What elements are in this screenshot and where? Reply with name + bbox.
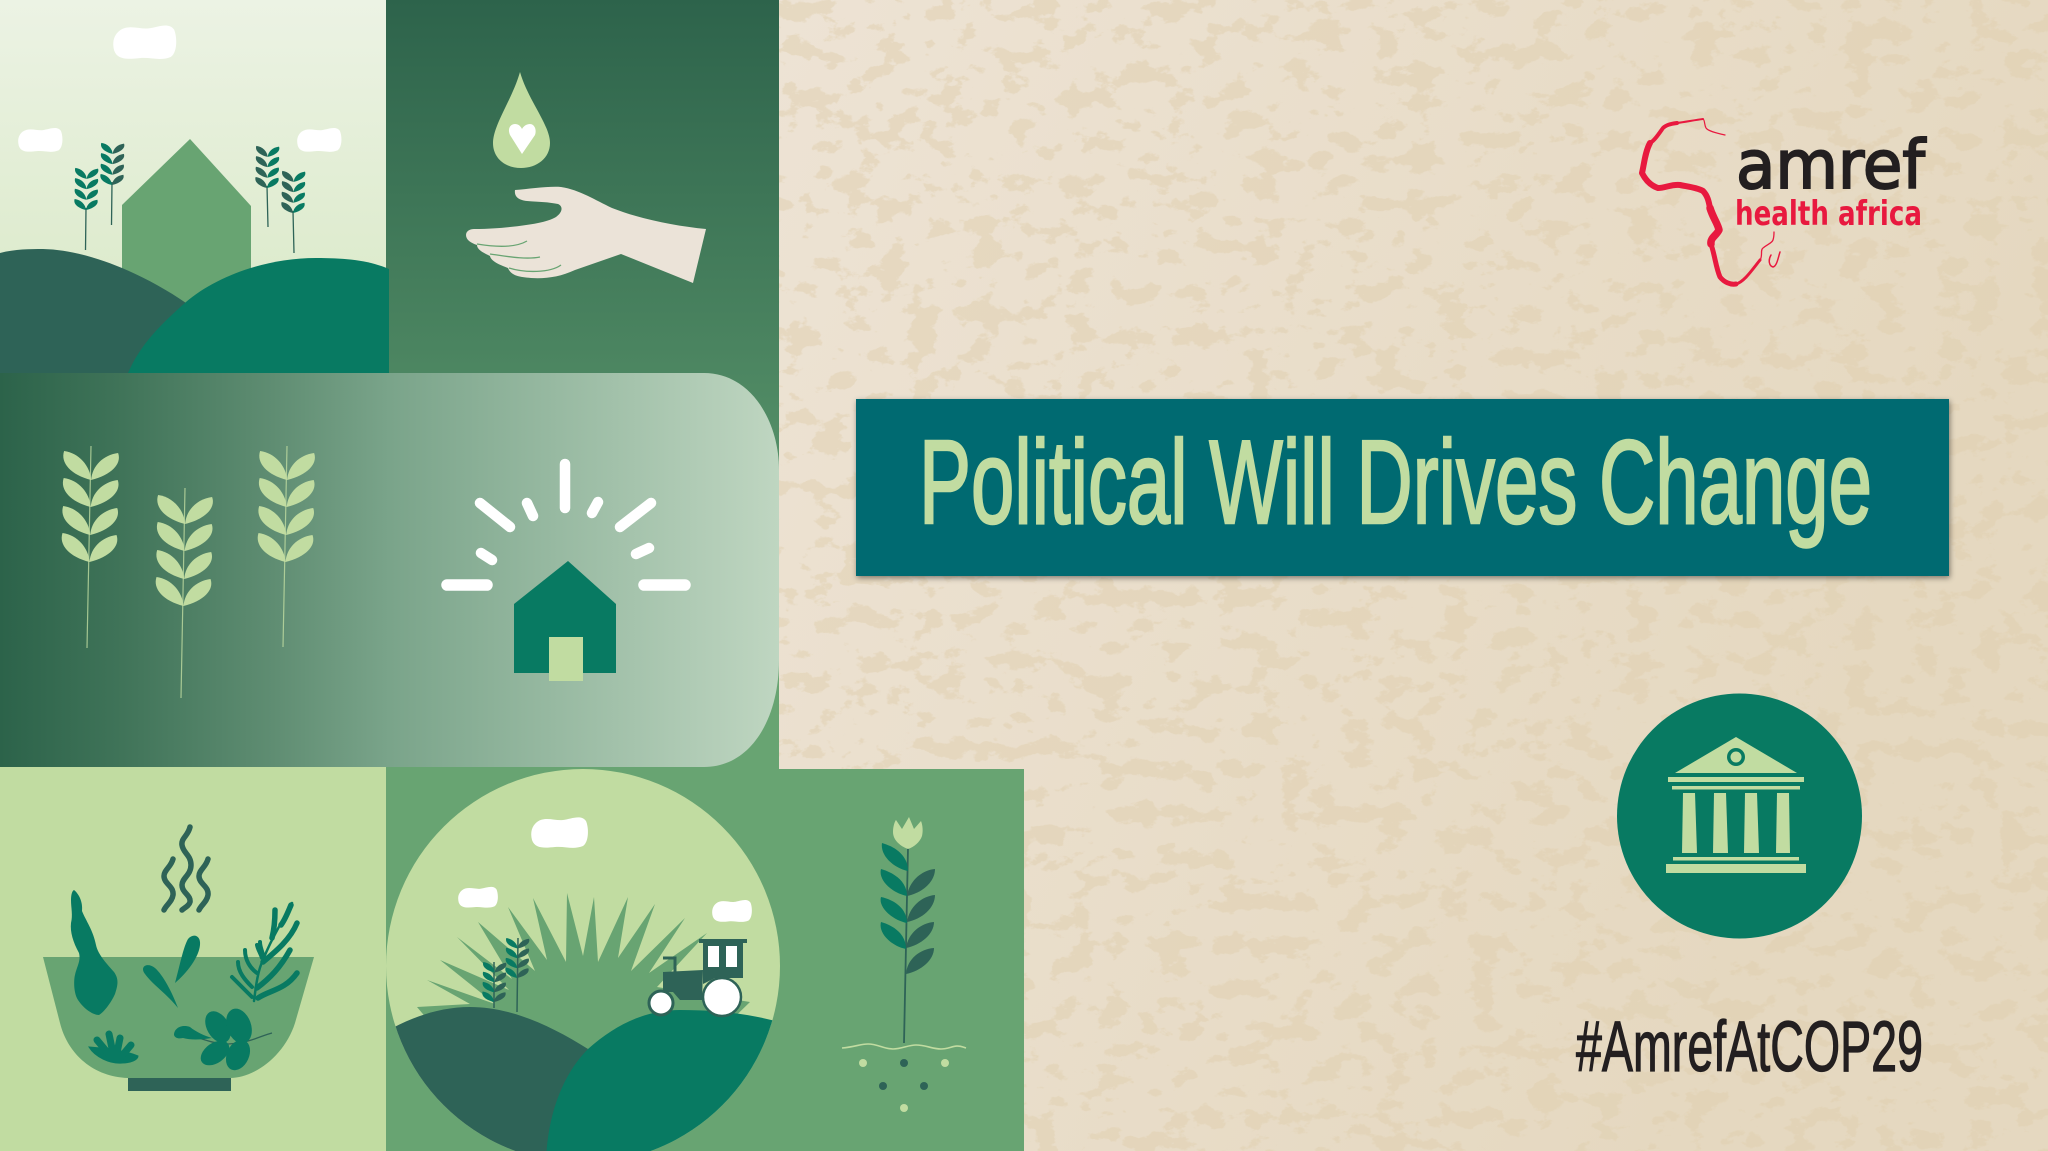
logo: amref health africa: [1642, 119, 1926, 284]
icon: three light wheat stalks: [62, 446, 315, 698]
icon: flower bud: [893, 817, 923, 849]
icon: herb leaves: [174, 1005, 272, 1074]
icon: water drop with heart: [493, 72, 550, 168]
icon: dark hill: [0, 249, 225, 373]
panel: tractor landscape circle: [380, 769, 790, 1151]
icon: left leaves: [881, 843, 908, 949]
icon: green hill: [128, 258, 389, 373]
panel: village sky with house and hills: [0, 0, 389, 373]
logo wordmark: health africa: health africa: [1735, 194, 1922, 234]
panel: hand and water drop: [386, 0, 779, 580]
title banner: [856, 399, 1949, 576]
icon: stem: [904, 848, 908, 1043]
panel: lower middle green background: [386, 569, 1024, 1151]
icon: Africa outline: [1642, 119, 1780, 284]
icon: fern sprig: [232, 903, 297, 1001]
icon: gourd and leaves: [71, 890, 200, 1015]
icon: green hill: [546, 1010, 790, 1151]
icon: right leaves: [906, 869, 935, 974]
icon: tractor: [649, 939, 747, 1016]
panel: seedling with soil: [842, 817, 966, 1112]
icon: dark hill: [380, 1007, 588, 1151]
icon: home with door: [514, 561, 616, 681]
icon: soil line: [842, 1044, 966, 1049]
icon: steam: [164, 827, 208, 910]
panel: rounded gradient band: [0, 373, 779, 767]
logo wordmark: amref: amref: [1736, 126, 1926, 204]
icon: open hand: [466, 187, 706, 283]
icon: small wheat: [482, 938, 529, 1012]
icon: large house silhouette: [122, 139, 251, 340]
icon: small wheat stalks: [74, 143, 305, 253]
icon: sun with rays: [417, 893, 750, 1050]
icon: glowing rays: [447, 464, 685, 585]
panel: herbal bowl: [0, 767, 386, 1151]
icon: government building in circle: [1617, 694, 1862, 938]
icon: soil dots: [859, 1059, 949, 1112]
icon: clouds: [18, 25, 341, 152]
icon: clouds: [458, 817, 752, 922]
icon: bowl: [43, 957, 314, 1091]
icon: small frond: [89, 1034, 138, 1063]
